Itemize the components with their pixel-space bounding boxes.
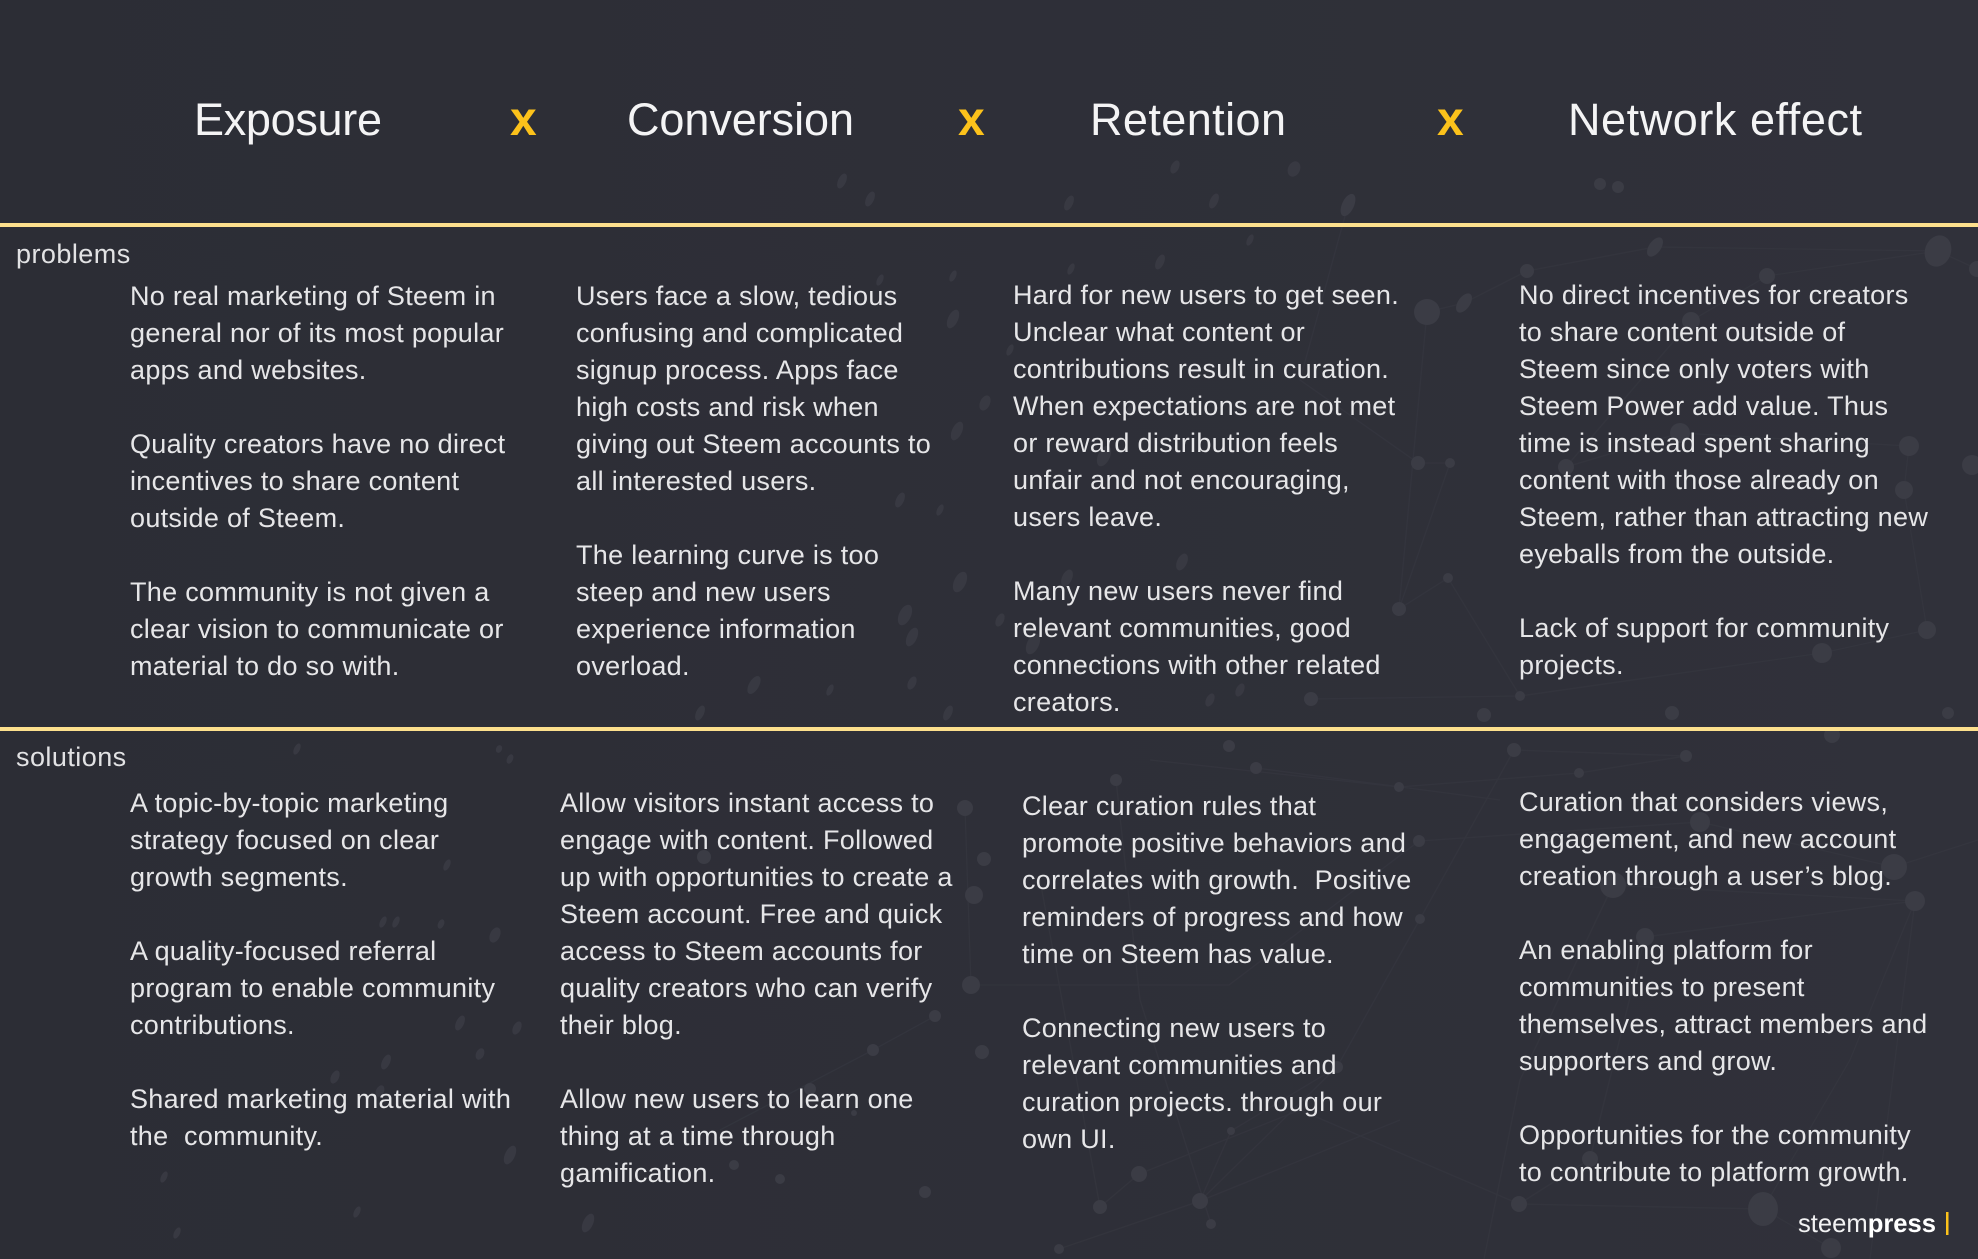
text: retention solutions: time on Steem has value.: [1022, 939, 1334, 969]
text: conversion problems: overload.: [576, 651, 690, 681]
text: network effect problems: to share content outside of: [1519, 317, 1846, 347]
divider above problems: [0, 223, 1978, 227]
heading: Exposure: Exposure: [194, 94, 382, 145]
divider above solutions: [0, 727, 1978, 731]
text: exposure solutions: growth segments.: [130, 862, 348, 892]
text: conversion problems: giving out Steem accounts to: [576, 429, 931, 459]
text: conversion solutions: Allow new users to learn one: [560, 1084, 914, 1114]
text: retention solutions: Connecting new users to: [1022, 1013, 1326, 1043]
text: exposure problems: apps and websites.: [130, 355, 367, 385]
text: exposure problems: Quality creators have no direct: [130, 429, 506, 459]
text: network effect problems: projects.: [1519, 650, 1624, 680]
multiply sign 1: x: [510, 93, 537, 146]
text: retention solutions: Clear curation rules that: [1022, 791, 1316, 821]
section label: solutions: solutions: [16, 742, 127, 772]
text: conversion solutions: up with opportunities to create a: [560, 862, 953, 892]
text: network effect solutions: to contribute to platform growth.: [1519, 1157, 1909, 1187]
text: conversion solutions: gamification.: [560, 1158, 715, 1188]
text: retention problems: Many new users never find: [1013, 576, 1343, 606]
text: retention problems: users leave.: [1013, 502, 1162, 532]
heading: Retention: Retention: [1090, 94, 1286, 145]
text: retention solutions: curation projects. through our: [1022, 1087, 1382, 1117]
text: retention problems: unfair and not encouraging,: [1013, 465, 1350, 495]
text: conversion solutions: Steem account. Free and quick: [560, 899, 943, 929]
text: network effect solutions: engagement, and new account: [1519, 824, 1897, 854]
multiply sign 2: x: [958, 93, 985, 146]
text: exposure solutions: contributions.: [130, 1010, 295, 1040]
text: network effect problems: time is instead spent sharing: [1519, 428, 1870, 458]
text: retention problems: or reward distribution feels: [1013, 428, 1338, 458]
text: conversion problems: signup process. Apps face: [576, 355, 899, 385]
text: exposure problems: The community is not given a: [130, 577, 490, 607]
heading: Network effect: Network effect: [1568, 94, 1862, 145]
text: retention problems: creators.: [1013, 687, 1121, 717]
text: conversion problems: all interested users.: [576, 466, 816, 496]
text: network effect problems: content with those already on: [1519, 465, 1879, 495]
text: retention solutions: correlates with growth. Positive: [1022, 865, 1412, 895]
text: exposure solutions: A quality-focused referral: [130, 936, 436, 966]
text: retention problems: relevant communities, good: [1013, 613, 1351, 643]
text: conversion solutions: access to Steem accounts for: [560, 936, 923, 966]
text: network effect solutions: themselves, attract members and: [1519, 1009, 1927, 1039]
text: retention problems: contributions result in curation.: [1013, 354, 1389, 384]
text: conversion solutions: engage with content. Followed: [560, 825, 933, 855]
text: exposure problems: incentives to share content: [130, 466, 459, 496]
text: exposure solutions: the community.: [130, 1121, 323, 1151]
text: conversion problems: experience information: [576, 614, 856, 644]
text: exposure solutions: program to enable community: [130, 973, 495, 1003]
text: conversion problems: high costs and risk when: [576, 392, 879, 422]
text: exposure solutions: strategy focused on clear: [130, 825, 439, 855]
text: network effect problems: Steem, rather than attracting new: [1519, 502, 1928, 532]
text: exposure solutions: Shared marketing material with: [130, 1084, 511, 1114]
text: conversion problems: steep and new users: [576, 577, 831, 607]
multiply sign 3: x: [1437, 93, 1464, 146]
text: network effect solutions: An enabling platform for: [1519, 935, 1813, 965]
brand: steempress logo: steempress: [1798, 1210, 1936, 1238]
text: network effect solutions: communities to present: [1519, 972, 1805, 1002]
text: exposure problems: material to do so with.: [130, 651, 400, 681]
text: exposure solutions: A topic-by-topic marketing: [130, 788, 448, 818]
text: conversion solutions: thing at a time through: [560, 1121, 836, 1151]
text: retention problems: connections with other related: [1013, 650, 1381, 680]
text: exposure problems: outside of Steem.: [130, 503, 345, 533]
text: exposure problems: No real marketing of Steem in: [130, 281, 496, 311]
text: retention solutions: own UI.: [1022, 1124, 1116, 1154]
text: conversion solutions: Allow visitors instant access to: [560, 788, 934, 818]
panel: problems: [16, 239, 1936, 717]
text: network effect solutions: creation through a user’s blog.: [1519, 861, 1892, 891]
panel: solutions: [16, 742, 1935, 1188]
text: exposure problems: clear vision to communicate or: [130, 614, 504, 644]
text: conversion solutions: quality creators who can verify: [560, 973, 933, 1003]
section label: problems: problems: [16, 239, 131, 269]
text: network effect solutions: supporters and grow.: [1519, 1046, 1777, 1076]
text: network effect solutions: Opportunities for the community: [1519, 1120, 1911, 1150]
text: network effect solutions: Curation that considers views,: [1519, 787, 1888, 817]
text: retention solutions: promote positive behaviors and: [1022, 828, 1406, 858]
text: retention problems: Hard for new users to get seen.: [1013, 280, 1399, 310]
text: network effect problems: Lack of support for community: [1519, 613, 1890, 643]
text: conversion solutions: their blog.: [560, 1010, 682, 1040]
text: conversion problems: confusing and complicated: [576, 318, 903, 348]
heading: Conversion: Conversion: [627, 94, 854, 145]
text: network effect problems: Steem since only voters with: [1519, 354, 1870, 384]
text: network effect problems: eyeballs from the outside.: [1519, 539, 1834, 569]
text: conversion problems: The learning curve is too: [576, 540, 879, 570]
text: network effect problems: Steem Power add value. Thus: [1519, 391, 1888, 421]
text: retention solutions: reminders of progress and how: [1022, 902, 1403, 932]
text: exposure problems: general nor of its most popular: [130, 318, 504, 348]
text: retention solutions: relevant communities and: [1022, 1050, 1337, 1080]
text: network effect problems: No direct incentives for creators: [1519, 280, 1909, 310]
text: retention problems: When expectations are not met: [1013, 391, 1396, 421]
text: conversion problems: Users face a slow, tedious: [576, 281, 897, 311]
text: retention problems: Unclear what content or: [1013, 317, 1305, 347]
title row: four growth factors: [194, 93, 1862, 146]
